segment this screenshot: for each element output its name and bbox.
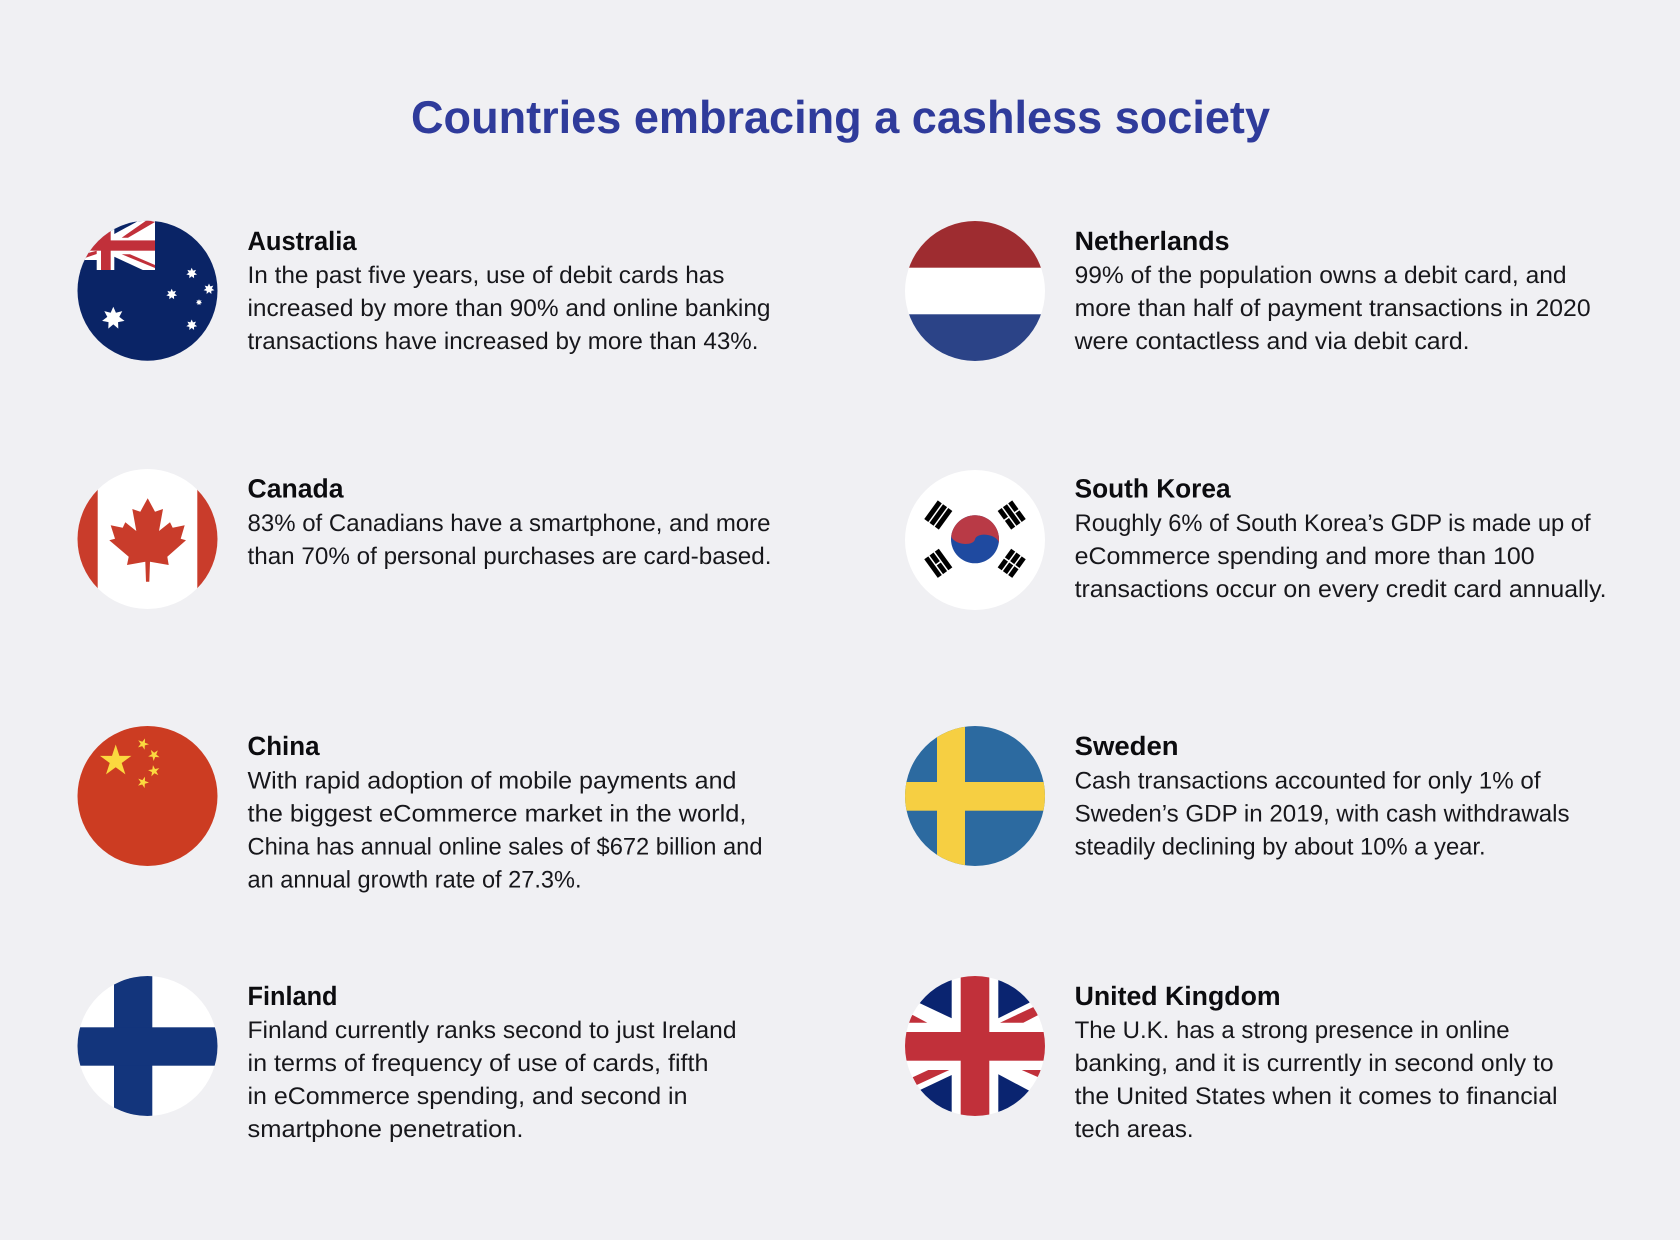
text: South Korea body: eCommerce spending and more than 100 (1075, 543, 1535, 570)
panel: Australia (77, 220, 770, 362)
text: Sweden body (1075, 768, 1570, 860)
text: Sweden body: Cash transactions accounted for only 1% of (1075, 768, 1541, 794)
icon: Australia flag (77, 220, 218, 362)
heading: Netherlands: Netherlands (1075, 226, 1230, 256)
heading: Sweden: Sweden (1075, 731, 1179, 761)
text: Canada body (248, 510, 772, 570)
text: Finland body: smartphone penetration. (248, 1116, 524, 1143)
icon: Canada flag (77, 468, 218, 610)
panel: China (77, 725, 762, 894)
panel: South Korea (905, 470, 1607, 610)
text: Australia body: transactions have increased by more than 43%. (248, 328, 758, 355)
text: Netherlands body: more than half of payment transactions in 2020 (1075, 295, 1591, 322)
panel: Netherlands (904, 220, 1591, 362)
text: China body: With rapid adoption of mobile payments and (248, 768, 736, 794)
icon: Finland flag (77, 975, 218, 1117)
panel: Canada (77, 468, 772, 610)
text: South Korea body (1075, 510, 1607, 603)
text: United Kingdom body: banking, and it is currently in second only to (1075, 1050, 1554, 1077)
text: Sweden body: steadily declining by about 10% a year. (1075, 834, 1486, 860)
text: Australia body: In the past five years, use of debit cards has (248, 262, 724, 289)
text: Canada body: 83% of Canadians have a smartphone, and more (248, 510, 770, 537)
heading: China: China (248, 731, 320, 761)
heading: South Korea: South Korea (1075, 474, 1231, 504)
text: Netherlands body: 99% of the population owns a debit card, and (1075, 262, 1567, 289)
text: Australia body: increased by more than 90% and online banking (248, 295, 770, 322)
text: United Kingdom body: the United States when it comes to financial (1075, 1083, 1558, 1110)
icon: Sweden flag (904, 725, 1046, 867)
text: China body (248, 768, 762, 894)
heading: Australia: Australia (248, 226, 357, 256)
text: Finland body: in terms of frequency of use of cards, fifth (248, 1050, 708, 1077)
text: South Korea body: transactions occur on every credit card annually. (1075, 576, 1607, 603)
text: United Kingdom body (1075, 1017, 1558, 1143)
panel: Finland (77, 975, 736, 1143)
text: Finland body: in eCommerce spending, and second in (248, 1083, 688, 1110)
icon: Netherlands flag (904, 220, 1046, 362)
text: China body: China has annual online sales of $672 billion and (248, 834, 762, 860)
icon: United Kingdom flag (900, 973, 1050, 1117)
text: Australia body (248, 262, 770, 355)
text: South Korea body: Roughly 6% of South Korea’s GDP is made up of (1075, 510, 1591, 537)
text: Canada body: than 70% of personal purchases are card-based. (248, 543, 772, 570)
text: Finland body (248, 1017, 736, 1143)
icon: South Korea flag (905, 470, 1045, 610)
icon: China flag (77, 725, 218, 867)
heading: Finland: Finland (248, 981, 338, 1011)
text: Netherlands body: were contactless and via debit card. (1074, 328, 1470, 355)
title: Countries embracing a cashless society (411, 91, 1270, 143)
text: Sweden body: Sweden’s GDP in 2019, with cash withdrawals (1075, 800, 1570, 828)
text: United Kingdom body: tech areas. (1075, 1116, 1194, 1143)
panel: United Kingdom (900, 973, 1558, 1143)
text: Finland body: Finland currently ranks second to just Ireland (248, 1017, 736, 1044)
text: China body: the biggest eCommerce market in the world, (248, 800, 746, 828)
panel: Sweden (904, 725, 1570, 867)
heading: Canada: Canada (248, 474, 344, 504)
heading: United Kingdom: United Kingdom (1075, 981, 1281, 1011)
text: United Kingdom body: The U.K. has a strong presence in online (1075, 1017, 1510, 1044)
text: China body: an annual growth rate of 27.3%. (248, 866, 582, 894)
text: Netherlands body (1074, 262, 1591, 355)
